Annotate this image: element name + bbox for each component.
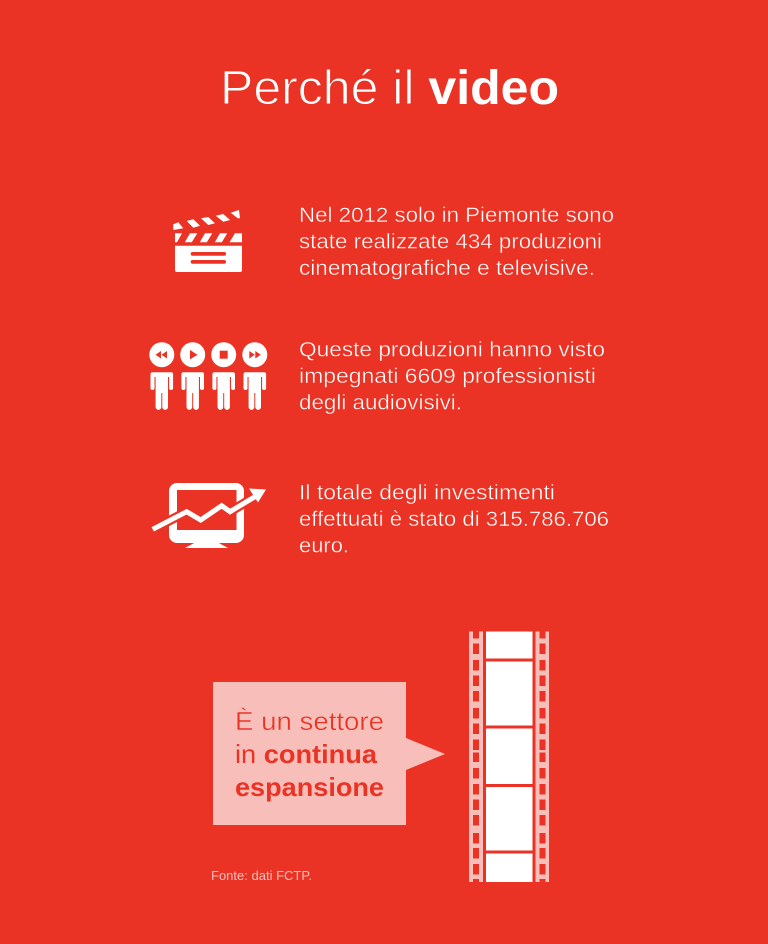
text block: professionisti: impegnati 6609 professionisti (299, 365, 596, 388)
icon: monitor with rising arrow (153, 483, 266, 548)
text block: professionisti (299, 338, 605, 414)
text block: produzioni (299, 204, 614, 280)
text block: professionisti: Queste produzioni hanno visto (299, 338, 605, 362)
text block: produzioni: cinematografiche e televisive. (299, 257, 595, 280)
text block: investimenti: Il totale degli investimenti (299, 482, 555, 504)
callout (213, 682, 445, 825)
text block: investimenti: effettuati è stato di 315.786.706 (299, 508, 609, 531)
callout: espansione (235, 772, 384, 802)
title: Perché il video (220, 62, 559, 115)
icon: four people with media buttons (149, 342, 267, 410)
icon: film clapperboard (173, 210, 242, 272)
icon: film strip (469, 632, 549, 882)
source note: Fonte: dati FCTP. (211, 868, 312, 883)
callout: in continua (235, 739, 378, 769)
text block: investimenti: euro. (299, 534, 349, 558)
text block: investimenti (299, 482, 609, 558)
text block: produzioni: state realizzate 434 produzioni (299, 230, 602, 254)
callout: È un settore (235, 706, 384, 736)
text block: produzioni: Nel 2012 solo in Piemonte sono (299, 204, 614, 227)
text block: professionisti: degli audiovisivi. (299, 392, 462, 414)
